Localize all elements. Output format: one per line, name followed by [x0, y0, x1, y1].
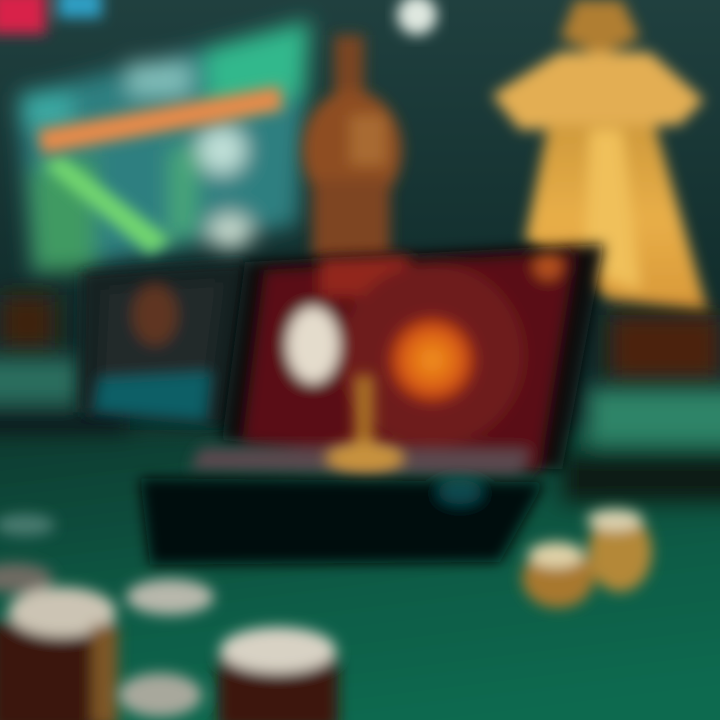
- ceiling light: [397, 0, 437, 35]
- left wall screen with chart: [18, 20, 310, 275]
- laptop keyboard base: [140, 478, 545, 565]
- trophy stem in front of laptop: [325, 375, 405, 474]
- chart: green trend line: [42, 156, 172, 255]
- corner sign: red and blue lights: [0, 0, 102, 34]
- poker chip stack centre: [118, 627, 338, 720]
- gold dice right: [522, 509, 652, 608]
- laptop bezel: [222, 244, 604, 470]
- poker chips bottom left: [0, 514, 214, 720]
- golden tower: [492, 0, 708, 312]
- back wall shelf: dark brown: [0, 295, 720, 380]
- laptop display: [190, 252, 576, 476]
- chart: orange banner: [38, 86, 283, 154]
- statue: [302, 35, 402, 260]
- laptop screen: [190, 244, 604, 476]
- tablet left: [80, 262, 248, 425]
- table surface: [0, 358, 720, 720]
